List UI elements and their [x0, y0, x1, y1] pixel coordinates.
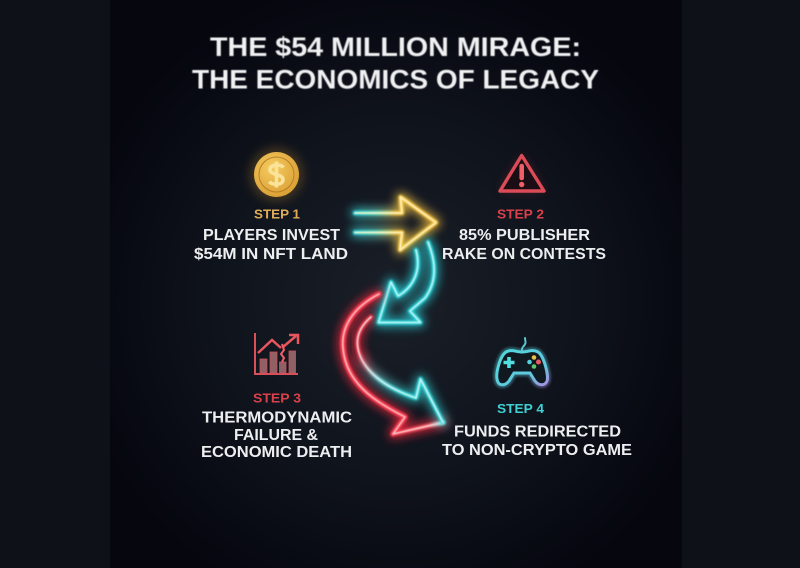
cyan glow and body	[357, 317, 443, 422]
arrow: step 2 to step 3	[378, 242, 434, 322]
step 1	[194, 148, 348, 263]
step 4 description: FUNDS REDIRECTED	[454, 424, 621, 440]
step 4 description	[442, 424, 632, 459]
icon: game controller	[497, 338, 547, 385]
step 3 description: FAILURE &	[234, 427, 318, 444]
title	[192, 32, 599, 94]
step 3	[201, 333, 352, 461]
step 1 description: PLAYERS INVEST	[203, 227, 341, 244]
step 1 description	[194, 227, 348, 263]
step 2 label: STEP 2	[497, 206, 544, 221]
step 3 description: ECONOMIC DEATH	[201, 444, 352, 461]
step 4	[442, 338, 632, 459]
step 2 description: RAKE ON CONTESTS	[442, 246, 606, 263]
step 3 description: THERMODYNAMIC	[202, 410, 352, 426]
icon: crashing bar chart	[255, 333, 298, 374]
title: THE $54 MILLION MIRAGE:	[210, 32, 581, 62]
arrow: step 1 to step 2	[355, 197, 436, 250]
step 4 label: STEP 4	[497, 401, 545, 416]
arrow: step 3 to step 4	[343, 294, 443, 434]
step 1 label: STEP 1	[254, 206, 300, 221]
icon: gold coin	[250, 148, 304, 202]
red glow and body	[343, 294, 443, 434]
step 2 description	[442, 227, 606, 263]
step 4 description: TO NON-CRYPTO GAME	[442, 442, 632, 459]
step 2 description: 85% PUBLISHER	[459, 227, 590, 244]
step 3 label: STEP 3	[253, 390, 301, 405]
step 3 description	[201, 410, 352, 461]
icon: warning triangle	[500, 155, 544, 191]
title: THE ECONOMICS OF LEGACY	[192, 64, 599, 94]
step 1 description: $54M IN NFT LAND	[194, 246, 348, 263]
step 2	[442, 155, 606, 263]
